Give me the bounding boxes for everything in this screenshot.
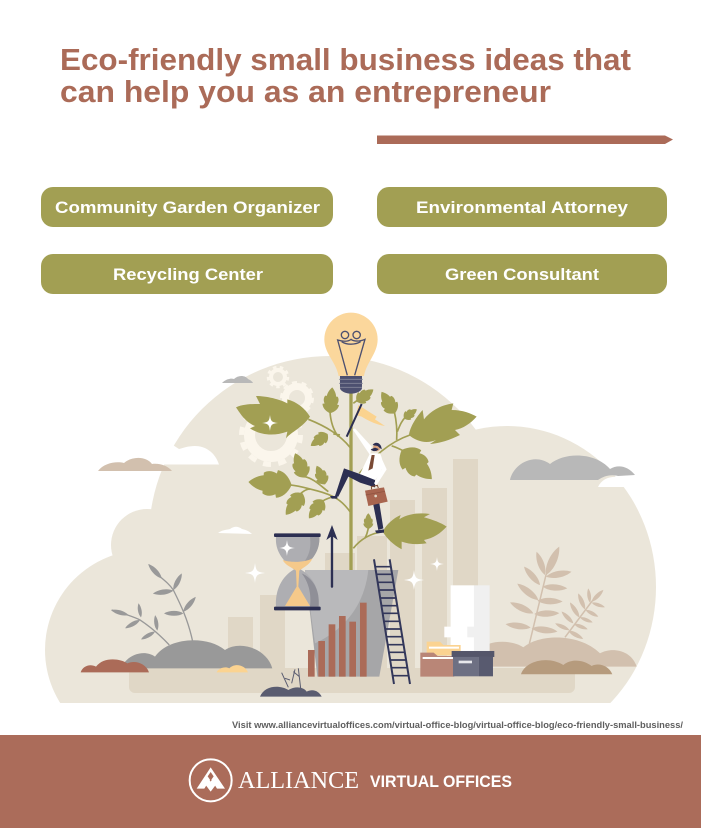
button: Recycling Center [41, 254, 333, 294]
button: Recycling Center: Recycling Center [113, 265, 263, 284]
white clouds at hill edge [155, 440, 632, 534]
button: Green Consultant [377, 254, 667, 294]
right beige plants and mounds [488, 545, 637, 674]
gears [242, 367, 312, 464]
logo wordmark [238, 768, 512, 794]
potted pot [305, 570, 398, 677]
button: Community Garden Organizer [41, 187, 333, 227]
sparkles [245, 415, 444, 590]
stacked papers [444, 585, 490, 652]
background bars [228, 459, 478, 668]
source url: Visit www.alliancevirtualoffices.com/virtual-office-blog/virtual-office-blog/eco-friendly-small-business/ [232, 720, 683, 731]
footer band [0, 735, 701, 828]
bar chart [308, 603, 367, 677]
ground platform [129, 668, 575, 693]
ladder [374, 559, 410, 684]
flag [347, 404, 385, 437]
clouds [98, 376, 635, 480]
logo wordmark: ALLIANCE [238, 768, 359, 794]
button: Green Consultant: Green Consultant [445, 265, 599, 284]
icon: hourglass [274, 533, 321, 610]
button: Environmental Attorney: Environmental Attorney [416, 198, 629, 217]
left grey plants and mounds [81, 562, 272, 672]
background hill [0, 356, 701, 750]
icon: growth arrow [326, 525, 338, 587]
button: Community Garden Organizer: Community Garden Organizer [55, 198, 320, 217]
storage box [452, 651, 494, 676]
button: Environmental Attorney [377, 187, 667, 227]
plant stem and branches [290, 393, 410, 580]
icon: light bulb [324, 313, 378, 394]
title [60, 42, 631, 109]
climbing businessman [330, 428, 388, 533]
plant leaves [236, 384, 477, 549]
icon: alliance logo [190, 759, 232, 801]
dark mound with twigs [260, 668, 322, 697]
logo wordmark: VIRTUAL OFFICES [370, 773, 512, 791]
title: Eco-friendly small business ideas that [60, 42, 631, 77]
folder [420, 642, 461, 677]
idea buttons [41, 187, 667, 294]
title: can help you as an entrepreneur [60, 74, 551, 109]
divider arrow [377, 136, 673, 144]
illustration: growth plant scene [0, 313, 701, 750]
